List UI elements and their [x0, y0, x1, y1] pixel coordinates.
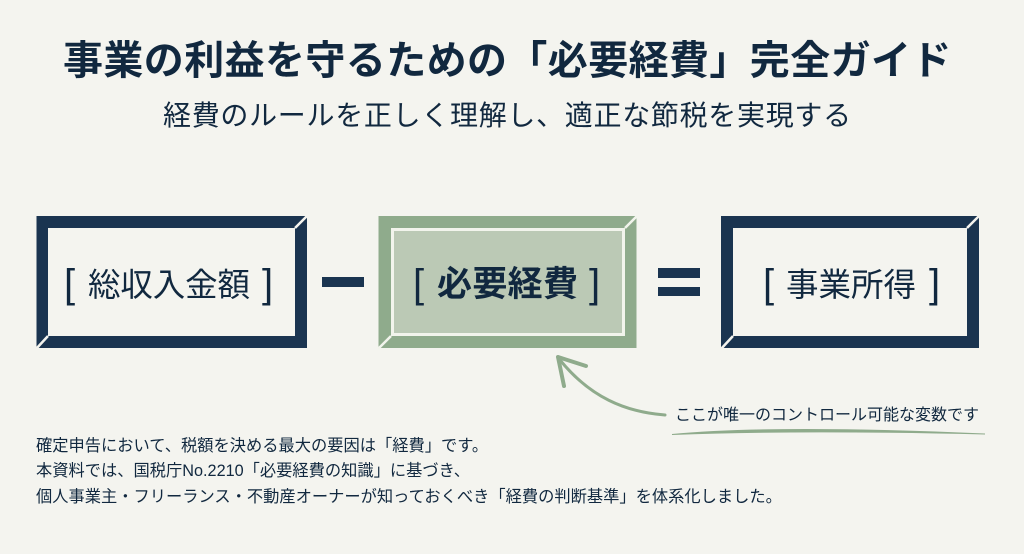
callout underline: [672, 430, 985, 434]
title: 事業の利益を守るための「必要経費」完全ガイド: [63, 39, 952, 83]
box: necessary expenses: [: [413, 262, 424, 306]
box: necessary expenses: [378, 216, 637, 349]
callout text: ここが唯一のコントロール可能な変数です: [675, 407, 979, 424]
box: business income: ]: [929, 262, 940, 306]
operator: equals: [658, 268, 700, 296]
arrow: callout to expenses box: [558, 357, 665, 415]
body text: 個人事業主・フリーランス・不動産オーナーが知っておくべき「経費の判断基準」を体系化しました。: [36, 488, 782, 506]
body text: [36, 436, 782, 506]
body text: 本資料では、国税庁No.2210「必要経費の知識」に基づき、: [36, 462, 470, 480]
box: business income: [: [763, 262, 774, 306]
subtitle: 経費のルールを正しく理解し、適正な節税を実現する: [163, 100, 852, 131]
box: necessary expenses: ]: [589, 262, 600, 306]
body text: 確定申告において、税額を決める最大の要因は「経費」です。: [36, 436, 488, 454]
box: total income: 総収入金額: [88, 267, 250, 303]
box: total income: [36, 215, 308, 349]
box: total income: [: [64, 262, 75, 306]
box: business income: [721, 215, 980, 349]
box: necessary expenses: 必要経費: [437, 265, 578, 304]
box: business income: 事業所得: [786, 267, 916, 303]
box: total income: ]: [262, 262, 273, 306]
operator: minus: [322, 277, 364, 287]
